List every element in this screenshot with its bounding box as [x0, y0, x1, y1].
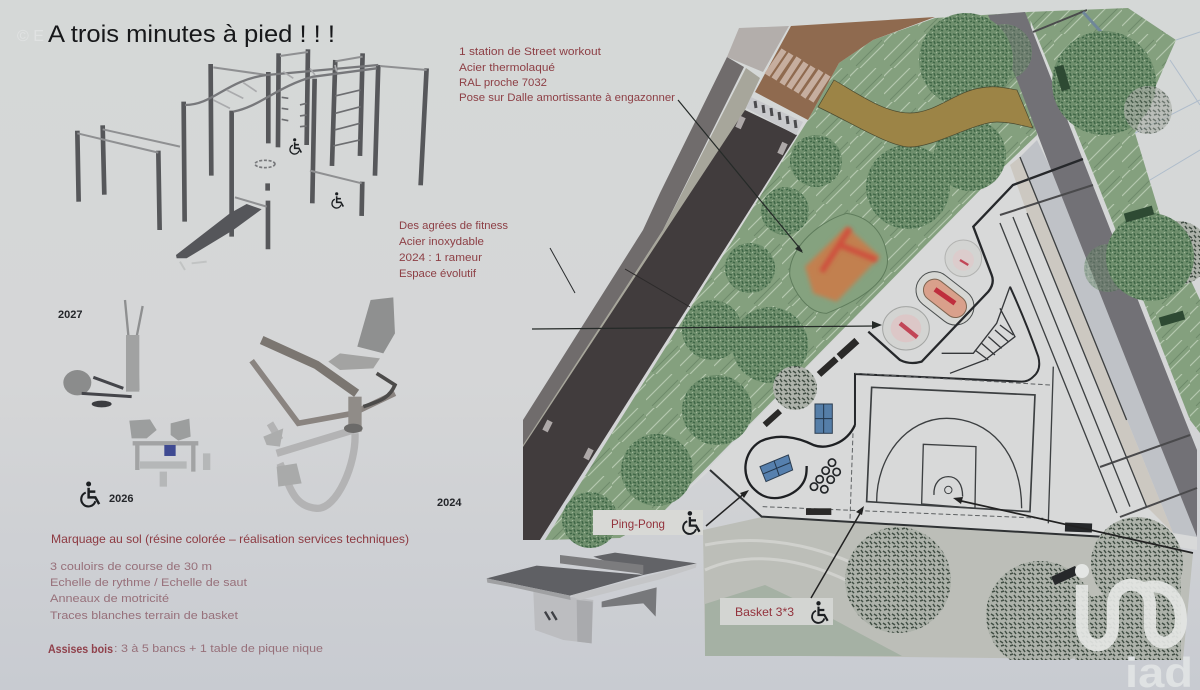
plan: faint blue line [1083, 12, 1120, 53]
text: wooden seating [48, 643, 323, 656]
illustration: street workout station [77, 49, 427, 270]
seating stripes [1000, 157, 1147, 523]
ping-pong table photo [487, 553, 697, 643]
text: street workout description: 1 station de Street workout [459, 46, 601, 58]
plan: dark cycle road [523, 110, 797, 540]
text: wooden seating: Assises bois [48, 644, 113, 656]
text: fitness equipment description: Acier inoxydable [399, 236, 484, 248]
text: street workout description: RAL proche 7032 [459, 77, 547, 89]
plan: hatch strip [746, 97, 803, 135]
plan: southern ground area [703, 517, 1193, 660]
plan: trees south [845, 517, 1183, 669]
text: street workout description: Pose sur Dalle amortissante à engazonner [459, 92, 675, 104]
benches [763, 338, 859, 515]
plan: cycle road marks [545, 117, 785, 459]
plan: pedestrian crossing [767, 50, 828, 101]
plan: brown crossing square [755, 17, 935, 120]
steps [942, 287, 1015, 373]
fitness: machine zone 1 [883, 307, 929, 350]
plan: eastern lawn [1027, 8, 1200, 433]
plan: pale plaza [727, 26, 789, 72]
arrow: street workout pointer [678, 100, 803, 253]
text: fitness equipment description: 2024 : 1 rameur [399, 252, 482, 264]
label: basket 3*3: Basket 3*3 [735, 605, 794, 619]
dashed court limit [763, 373, 1050, 520]
site plan [523, 8, 1200, 669]
text: fitness equipment description: Espace évolutif [399, 268, 477, 280]
arrow: court pointer [953, 497, 1193, 553]
plan: sports facilities [710, 157, 1147, 538]
plan: path median [523, 68, 760, 447]
label: 2024: 2024 [437, 497, 462, 509]
basketball court [867, 387, 1035, 512]
label: basket 3*3 [720, 598, 833, 625]
text: ground marking: Echelle de rythme / Echelle de saut [50, 577, 247, 589]
plan: thin line across road [625, 269, 690, 307]
title: A trois minutes à pied ! ! ! [48, 21, 335, 48]
plan: ochre footpath [818, 80, 1033, 147]
tick line [550, 248, 575, 293]
track: running track [868, 159, 1083, 363]
arrow: ping-pong pointer [706, 490, 749, 526]
illustration: 2026 double seat machine [129, 419, 207, 487]
label: 2027: 2027 [58, 309, 82, 321]
text: ground marking: Marquage au sol (résine colorée – réalisation services techniques) [51, 532, 409, 546]
plan: grey sidewalk [523, 57, 744, 447]
label: 2026: 2026 [109, 493, 133, 505]
ping-pong table, lower [760, 455, 793, 482]
arrow: basket pointer [811, 506, 864, 598]
motricity rings [810, 459, 840, 493]
plan: light strip along grey road [1020, 140, 1197, 537]
label: ping-pong [593, 510, 703, 535]
text: ground marking: Traces blanches terrain de basket [50, 610, 238, 622]
logo: iad [1075, 564, 1193, 690]
fitness: machine zone 3 [945, 240, 982, 277]
illustration: 2027 elliptical machine [63, 300, 143, 407]
south boundary line [710, 470, 1123, 538]
ping-pong table, upper [815, 404, 832, 433]
text: fitness equipment description [399, 220, 509, 280]
text: street workout description: Acier thermolaqué [459, 62, 555, 74]
text: ground marking: 3 couloirs de course de 30 m [50, 561, 212, 573]
label: ping-pong: Ping-Pong [611, 517, 665, 531]
icon: wheelchair on pull-up bar [332, 192, 343, 208]
text: wooden seating: : 3 à 5 bancs + 1 table de pique nique [114, 643, 323, 655]
fitness: machine zone 2 [909, 264, 981, 332]
plan: grey transversal road [988, 12, 1197, 537]
icon: wheelchair on station [290, 138, 301, 154]
plan: main lawn [545, 12, 1037, 540]
plan: road crossing lines [1000, 10, 1197, 517]
text: ground marking [50, 532, 409, 622]
icon: wheelchair 2026 [81, 481, 99, 506]
plan: south benches [1053, 527, 1092, 581]
text: street workout description [459, 46, 675, 104]
plan: cream strip [1010, 157, 1173, 533]
text: fitness equipment description: Des agrées de fitness [399, 220, 509, 232]
fitness: street workout footprint [790, 213, 888, 313]
arrow: fitness pointer [532, 321, 882, 329]
track: court boundary [855, 287, 1039, 425]
plan: trees on lawns [562, 13, 1200, 548]
title: © E [17, 28, 44, 45]
plan: sports court ground [680, 135, 1197, 550]
track: ping-pong loop [745, 425, 855, 498]
plan: benches on lawns [1059, 66, 1184, 322]
plan: faint background drawing lines [1135, 32, 1200, 180]
illustration: 2024 rowing machine [252, 297, 395, 508]
text: ground marking: Anneaux de motricité [50, 593, 169, 605]
